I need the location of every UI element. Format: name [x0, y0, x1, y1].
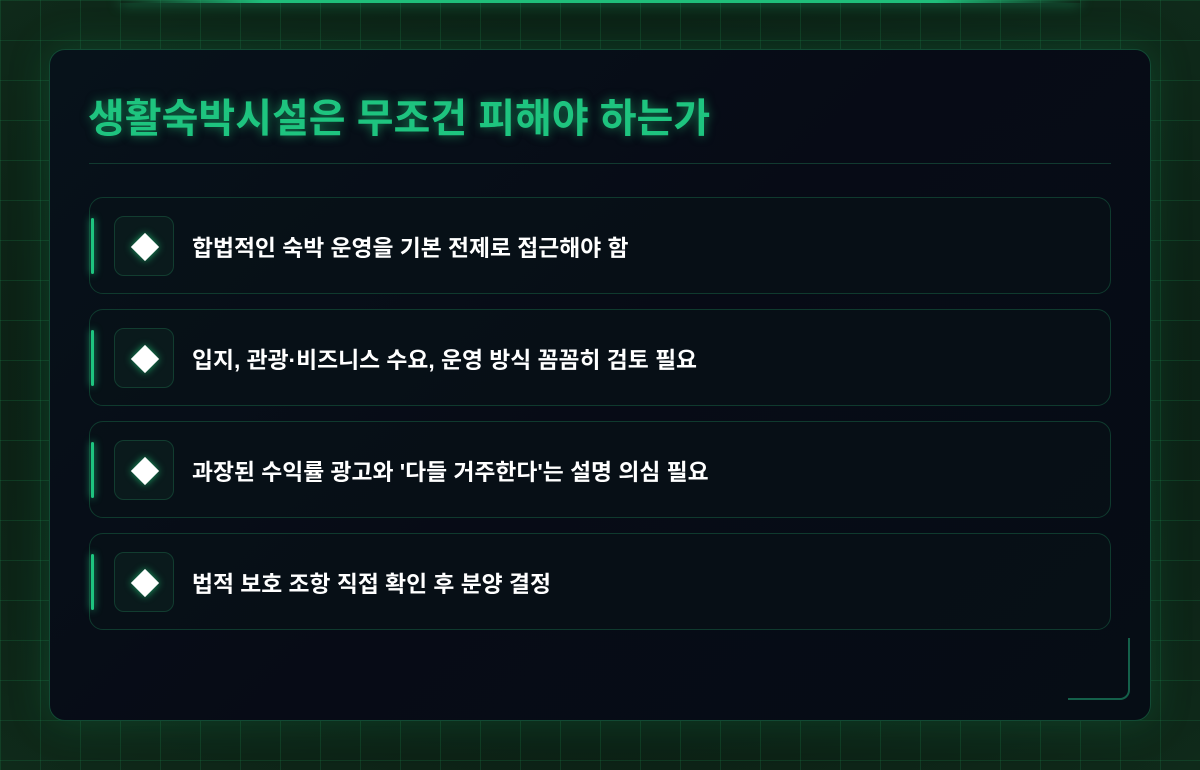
- text 2: 입지, 관광·비즈니스 수요, 운영 방식 꼼꼼히 검토 필요: [192, 347, 697, 373]
- item 4: [89, 533, 1111, 630]
- item 2: [89, 309, 1111, 406]
- text 3: 과장된 수익률 광고와 '다들 거주한다'는 설명 의심 필요: [192, 459, 709, 485]
- corner bracket: [1068, 638, 1130, 700]
- text 1: 합법적인 숙박 운영을 기본 전제로 접근해야 함: [192, 235, 628, 261]
- top glow line: [120, 0, 1080, 3]
- icon: diamond: [114, 216, 174, 276]
- title: 생활숙박시설은 무조건 피해야 하는가: [88, 97, 710, 141]
- icon: diamond: [114, 440, 174, 500]
- item 1: [89, 197, 1111, 294]
- text 4: 법적 보호 조항 직접 확인 후 분양 결정: [192, 571, 551, 597]
- icon: diamond: [114, 328, 174, 388]
- item 3: [89, 421, 1111, 518]
- icon: diamond: [114, 552, 174, 612]
